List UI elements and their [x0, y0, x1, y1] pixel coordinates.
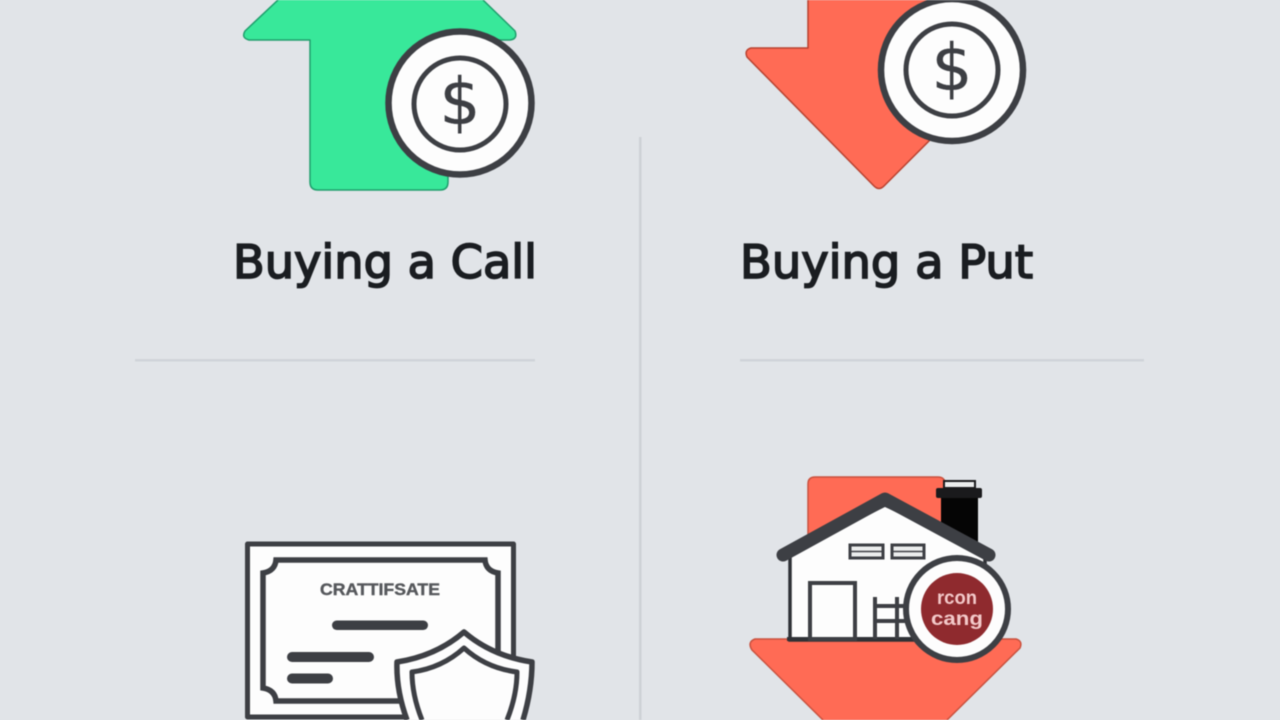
red down arrow	[750, 477, 1021, 720]
dollar coin: $	[440, 66, 480, 140]
heading: Buying a Put: Buying a Put	[740, 235, 1033, 289]
foreclosure badge	[906, 558, 1008, 660]
chimney	[936, 481, 982, 550]
certificate sheet	[248, 544, 514, 717]
roof	[783, 499, 989, 555]
dollar coin	[388, 32, 532, 174]
icon: red down arrow with dollar coin	[746, 0, 1023, 188]
icon: certificate with shield	[248, 544, 532, 720]
red down arrow	[746, 0, 960, 188]
foreclosure badge: rcon	[937, 588, 977, 609]
windows	[850, 545, 924, 558]
icon: house with falling red arrow and badge	[750, 477, 1021, 720]
certificate inner frame	[263, 560, 498, 701]
icon: green up arrow with dollar coin	[244, 0, 531, 190]
dollar coin	[881, 0, 1023, 141]
heading: Buying a Call: Buying a Call	[233, 235, 537, 289]
foreclosure badge: cang	[931, 609, 983, 630]
house body	[790, 505, 985, 640]
dollar coin: $	[932, 32, 972, 106]
door	[810, 583, 855, 639]
certificate title: CRATTIFSATE	[320, 580, 440, 599]
ladder	[873, 597, 905, 639]
shield	[397, 632, 532, 720]
green up arrow	[244, 0, 516, 190]
